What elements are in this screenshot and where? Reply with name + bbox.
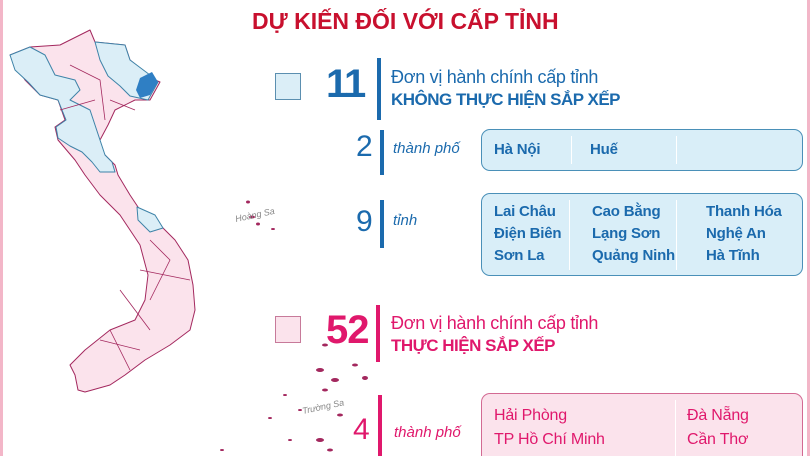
map of Vietnam: Hoàng Sa	[234, 206, 276, 224]
heading: merged	[391, 313, 598, 355]
text: thành phố	[394, 424, 461, 441]
box: provinces not merged: Lai Châu	[494, 203, 556, 220]
box: provinces not merged: Thanh Hóa	[706, 203, 782, 220]
box: cities not merged: Hà Nội	[494, 141, 540, 158]
box: cities merged: Cần Thơ	[687, 431, 748, 448]
map of Vietnam	[10, 30, 368, 452]
islands: Hoàng Sa	[246, 200, 275, 230]
box: provinces not merged: Hà Tĩnh	[706, 247, 760, 264]
heading: merged: THỰC HIỆN SẮP XẾP	[391, 336, 555, 355]
legend: merged	[275, 316, 301, 343]
box: provinces not merged: Điện Biên	[494, 225, 561, 242]
box: cities not merged	[481, 129, 803, 171]
heading: not merged: Đơn vị hành chính cấp tỉnh	[391, 67, 598, 87]
heading: not merged: KHÔNG THỰC HIỆN SẮP XẾP	[391, 90, 620, 109]
box: provinces not merged: Lạng Sơn	[592, 225, 660, 242]
text: tỉnh	[393, 212, 417, 229]
legend: not merged	[275, 73, 301, 100]
islands: Trường Sa	[220, 344, 368, 452]
box: cities merged: TP Hồ Chí Minh	[494, 431, 605, 448]
box: provinces not merged	[481, 193, 803, 276]
box: cities merged: Hải Phòng	[494, 407, 567, 424]
heading: merged: Đơn vị hành chính cấp tỉnh	[391, 313, 598, 333]
box: cities merged	[481, 393, 803, 456]
number 52: 52	[326, 308, 368, 352]
box: cities merged: Đà Nẵng	[687, 407, 749, 424]
row: 4 cities: 4	[353, 413, 370, 446]
box: provinces not merged: Cao Bằng	[592, 203, 660, 220]
row: 2 cities: 2	[356, 130, 373, 163]
box: cities not merged: Huế	[590, 141, 618, 158]
box: provinces not merged: Sơn La	[494, 247, 544, 264]
box: provinces not merged: Nghệ An	[706, 225, 766, 242]
heading: not merged	[391, 67, 620, 109]
text: thành phố	[393, 140, 460, 157]
map of Vietnam: Trường Sa	[301, 397, 345, 416]
row: 9 provinces: 9	[356, 205, 373, 238]
number 11: 11	[326, 62, 364, 106]
title: DỰ KIẾN ĐỐI VỚI CẤP TỈNH	[252, 8, 559, 34]
box: provinces not merged: Quảng Ninh	[592, 247, 675, 264]
